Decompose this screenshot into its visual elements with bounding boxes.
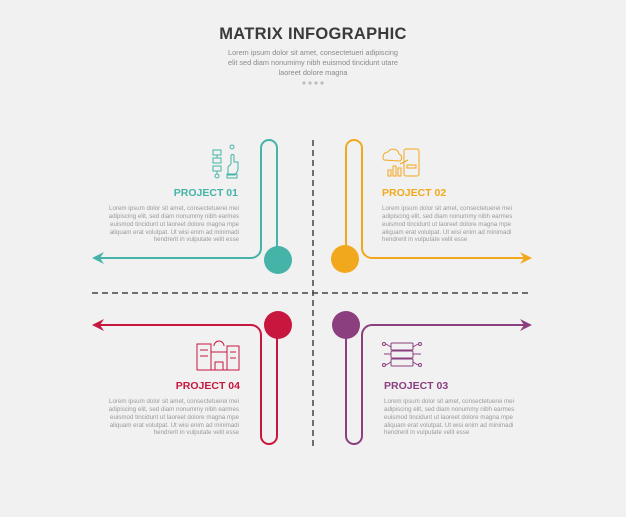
- subtitle: [228, 48, 398, 77]
- panel: project 02: adipiscing elit, sed diam nonummy nibh earmes: [382, 213, 512, 220]
- panel: project 04: euismod tincidunt ut laoreet dolore magna mpe: [110, 414, 240, 421]
- icon: buildings: [197, 341, 239, 370]
- panel: project 02: [331, 140, 532, 273]
- panel: project 03: aliquam erat volutpat. Ut wisi enim ad minimadi: [384, 422, 513, 429]
- panel: project 04: Lorem ipsum dolor sit amet, consectetuerei mei: [109, 398, 239, 405]
- icon: cloud and phone: [383, 149, 419, 176]
- panel: project 01: PROJECT 01: [174, 187, 238, 199]
- panel: project 02: Lorem ipsum dolor sit amet, consectetuerei mei: [382, 205, 512, 212]
- icon: server: [382, 342, 422, 366]
- panel: project 04: [92, 311, 292, 444]
- panel: project 04: PROJECT 04: [176, 380, 240, 392]
- panel: project 04: aliquam erat volutpat. Ut wisi enim ad minimadi: [110, 422, 239, 429]
- panel: project 04: hendrerit in vulputate velit esse: [154, 429, 240, 436]
- subtitle: elit sed diam nonumimy nibh euismod tincidunt utare: [228, 58, 398, 67]
- panel: project 02: euismod tincidunt ut laoreet dolore magna mpe: [382, 221, 512, 228]
- panel: project 01: hendrerit in vulputate velit esse: [154, 236, 240, 243]
- title: MATRIX INFOGRAPHIC: [219, 25, 407, 43]
- panel: project 01: [92, 140, 292, 274]
- panel: project 03: [332, 311, 532, 444]
- panel: project 03: adipiscing elit, sed diam nonummy nibh earmes: [384, 406, 514, 413]
- panel: project 02: PROJECT 02: [382, 187, 446, 199]
- dots: [302, 81, 324, 85]
- subtitle: Lorem ipsum dolor sit amet, consectetueri adipiscing: [228, 48, 398, 57]
- panel: project 04: adipiscing elit, sed diam nonummy nibh earmes: [109, 406, 239, 413]
- panel: project 01: Lorem ipsum dolor sit amet, consectetuerei mei: [109, 205, 239, 212]
- panel: project 03: hendrerit in vulputate velit esse: [384, 429, 470, 436]
- panel: project 01: adipiscing elit, sed diam nonummy nibh earmes: [109, 213, 239, 220]
- icon: robot hand: [213, 145, 238, 178]
- panel: project 03: euismod tincidunt ut laoreet dolore magna mpe: [384, 414, 514, 421]
- panel: project 03: Lorem ipsum dolor sit amet, consectetuerei mei: [384, 398, 514, 405]
- panel: project 02: hendrerit in vulputate velit esse: [382, 236, 468, 243]
- panel: project 01: euismod tincidunt ut laoreet dolore magna mpe: [110, 221, 240, 228]
- panel: project 03: PROJECT 03: [384, 380, 448, 392]
- panel: project 02: aliquam erat volutpat. Ut wisi enim ad minimadi: [382, 229, 511, 236]
- subtitle: laoreet dolore magna: [279, 68, 348, 77]
- panel: project 01: aliquam erat volutpat. Ut wisi enim ad minimadi: [110, 229, 239, 236]
